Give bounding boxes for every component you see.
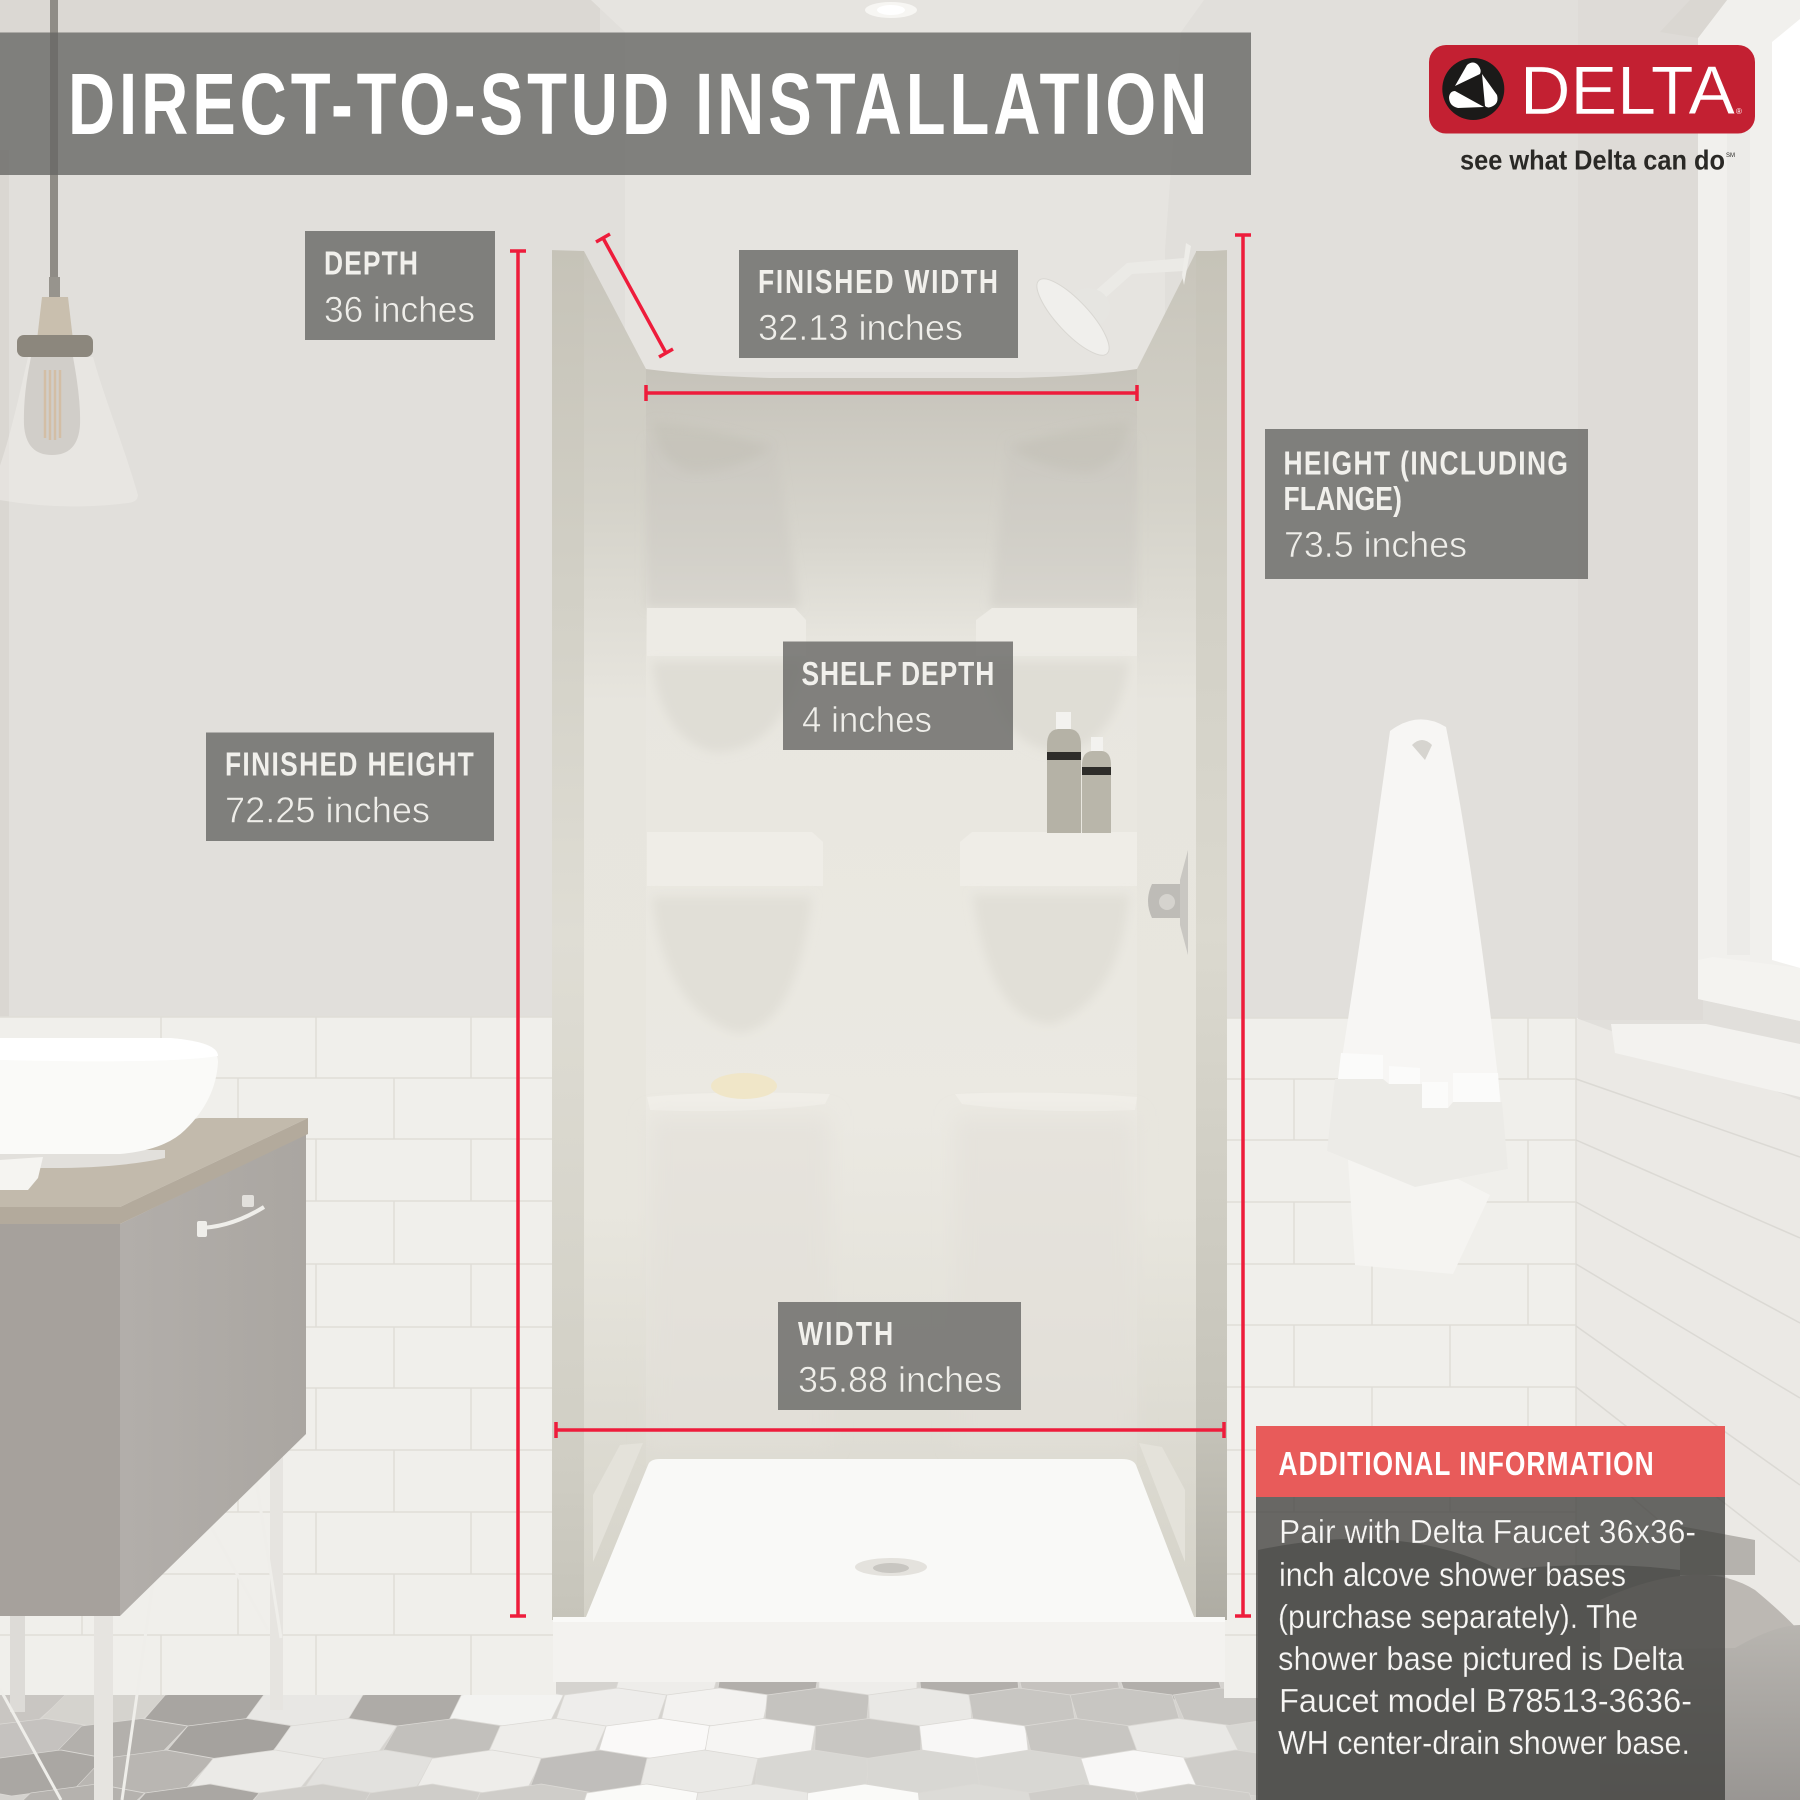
label: height including flange (1265, 429, 1588, 579)
label: width: 35.88 inches (798, 1359, 1002, 1400)
vessel sink and soap dish (0, 1038, 218, 1190)
panel body text: Faucet model B78513-3636- (1279, 1682, 1692, 1719)
label: finished height (206, 732, 494, 841)
label: height including flange: FLANGE) (1284, 481, 1402, 518)
dimension: finished height line (510, 251, 526, 1616)
label: finished height: 72.25 inches (225, 790, 430, 830)
label: depth (305, 231, 495, 340)
soap bar (711, 1073, 777, 1099)
shampoo bottles (1047, 712, 1111, 833)
pendant lamp (0, 0, 138, 507)
dimension: finished width line (646, 385, 1137, 401)
title banner (0, 32, 1251, 175)
shower head (1027, 243, 1191, 364)
panel: additional information (1256, 1426, 1725, 1800)
panel body text: inch alcove shower bases (1279, 1556, 1626, 1593)
service mark: SM (1726, 153, 1735, 159)
tile wainscot: back and right walls (1224, 1018, 1800, 1800)
Delta logo (1429, 45, 1755, 176)
label: depth: DEPTH (324, 246, 418, 282)
panel body text: Pair with Delta Faucet 36x36- (1279, 1513, 1696, 1550)
dimension: width line (556, 1422, 1224, 1438)
label: finished height: FINISHED HEIGHT (225, 747, 474, 783)
vanity with countertop and legs (0, 1118, 308, 1800)
registered mark: ® (1736, 107, 1742, 116)
towel on hook (1327, 719, 1508, 1274)
dimension: height including flange line (1235, 235, 1251, 1616)
label: shelf depth: 4 inches (802, 699, 932, 740)
panel heading (1256, 1426, 1725, 1497)
label: height including flange: 73.5 inches (1284, 524, 1467, 565)
icon: Delta emblem (1442, 58, 1504, 120)
floor: hexagon tiles (0, 1664, 1800, 1800)
label: height including flange: HEIGHT (INCLUDING (1284, 446, 1568, 482)
shower surround: back wall and flanges (552, 250, 1227, 1620)
label: finished width (739, 250, 1018, 358)
panel body text: (purchase separately). The (1278, 1598, 1638, 1635)
title text: DIRECT-TO-STUD INSTALLATION (68, 56, 1207, 153)
shower valve (1148, 850, 1188, 955)
label: width (778, 1302, 1021, 1410)
panel heading: ADDITIONAL INFORMATION (1278, 1446, 1654, 1483)
bathtub and towels at lower right (1258, 1526, 1800, 1800)
panel body text (1278, 1513, 1696, 1761)
tile wainscot: left wall (0, 1017, 556, 1695)
wordmark: DELTA (1520, 52, 1735, 129)
shower base pan (553, 1443, 1225, 1682)
panel body text: WH center-drain shower base. (1278, 1724, 1690, 1761)
shower shelves and shadows (647, 422, 1137, 1446)
panel body text: shower base pictured is Delta (1278, 1640, 1685, 1677)
label: depth: 36 inches (324, 289, 475, 330)
label: shelf depth: SHELF DEPTH (802, 656, 994, 693)
label: finished width: FINISHED WIDTH (758, 264, 998, 301)
dimension: depth line (596, 234, 673, 357)
label: finished width: 32.13 inches (758, 307, 963, 348)
label: width: WIDTH (798, 1316, 893, 1353)
label: shelf depth (783, 642, 1013, 750)
window and sill (1611, 0, 1800, 1097)
tagline: see what Delta can do (1460, 144, 1725, 176)
